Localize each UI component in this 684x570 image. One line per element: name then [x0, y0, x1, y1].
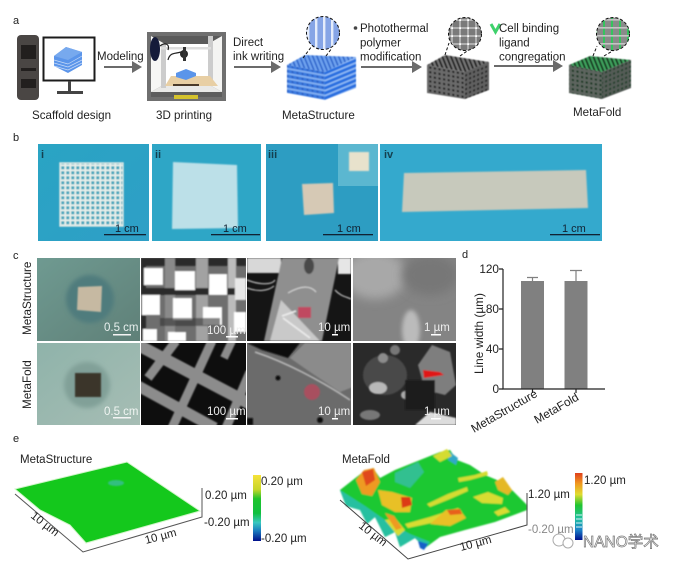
axis labels left surface — [28, 490, 250, 547]
arrow label: Cell binding ligand congregation: congregation — [499, 52, 566, 64]
panel b: scaffold photographs — [13, 132, 602, 241]
SEM: MetaFold 100 µm — [141, 343, 246, 425]
photo i: mesh scaffold — [38, 144, 149, 241]
icon: MetaStructure blue cube — [287, 16, 356, 100]
y tick labels: 40 — [486, 342, 499, 356]
axes — [499, 269, 605, 393]
caption: Scaffold design: Scaffold design — [32, 109, 111, 122]
axis labels left surface: 10 µm — [28, 510, 61, 539]
axis labels right surface: 10 µm — [459, 534, 493, 554]
SEM: MetaStructure 10 µm: 10 µm — [318, 322, 350, 334]
SEM: MetaFold 10 µm: 10 µm — [318, 406, 350, 418]
colorbar: MetaStructure: -0.20 µm — [261, 533, 307, 545]
y axis title: Line width (µm) — [472, 293, 486, 374]
panel a: fabrication workflow — [13, 15, 631, 122]
watermark: NANO学术: NANO学术 — [583, 533, 659, 551]
SEM: MetaStructure 1 µm: 1 µm — [424, 322, 450, 334]
arrow label: Cell binding ligand congregation: ligand — [499, 38, 530, 50]
photo iii: coated scaffold with inset: 1 cm — [337, 223, 361, 235]
caption: 3D printing: 3D printing — [156, 109, 212, 122]
SEM: MetaFold 1 µm — [353, 343, 456, 425]
photo i: mesh scaffold: 1 cm — [115, 223, 139, 235]
arrow label: Cell binding ligand congregation — [491, 23, 566, 64]
icon: 3D printer — [147, 32, 226, 101]
y tick labels: 80 — [486, 302, 499, 316]
photo ii: film scaffold — [152, 144, 261, 241]
heading: MetaFold: MetaFold — [342, 454, 390, 466]
SEM: MetaStructure 1 µm — [353, 258, 456, 341]
3D surface: MetaFold — [340, 449, 527, 559]
label d: d — [462, 249, 468, 261]
arrow label: Modeling: Modeling — [97, 51, 144, 63]
y tick labels: 0 — [492, 382, 499, 396]
row label: MetaFold: MetaFold — [21, 360, 34, 409]
SEM: MetaStructure 100 µm: 100 µm — [207, 325, 246, 337]
photo iv: long strip: 1 cm — [562, 223, 586, 235]
arrow label: Direct ink writing: Direct — [233, 37, 264, 49]
photo: MetaStructure sample: 0.5 cm — [104, 322, 139, 334]
label e: e — [13, 433, 19, 445]
icon: dark coated cube — [427, 18, 489, 99]
colorbar: MetaFold: 1.20 µm — [584, 475, 626, 487]
x tick labels: MetaFold — [532, 390, 581, 427]
y tick labels — [479, 262, 499, 396]
axis labels left surface: 10 µm — [144, 527, 178, 547]
axis labels right surface: -0.20 µm — [528, 524, 574, 536]
axis labels left surface: 0.20 µm — [205, 490, 247, 502]
label c: c — [13, 250, 19, 262]
arrow label: Direct ink writing: ink writing — [233, 51, 284, 63]
panel e: surface topography — [13, 433, 659, 559]
arrow: modeling to printing — [104, 66, 140, 68]
arrow label: Photothermal polymer modification: polymer — [360, 38, 401, 50]
photo ii: film scaffold: 1 cm — [223, 223, 247, 235]
SEM: MetaFold 10 µm — [247, 343, 358, 425]
SEM: MetaFold 1 µm: 1 µm — [424, 406, 450, 418]
y tick labels: 120 — [479, 262, 499, 276]
arrow label: Photothermal polymer modification: Photothermal — [360, 23, 428, 35]
arrow label: Cell binding ligand congregation: Cell binding — [499, 23, 559, 35]
photo iv: long strip: iv — [384, 149, 394, 161]
arrow: congregation — [494, 65, 561, 67]
photo iv: long strip — [380, 144, 602, 241]
bars with error bars — [521, 270, 588, 389]
axis labels right surface: 10 µm — [356, 520, 389, 549]
caption: MetaFold: MetaFold — [573, 106, 621, 119]
arrow: printing to MetaStructure — [234, 66, 279, 68]
photo: MetaFold sample — [37, 343, 140, 425]
photo i: mesh scaffold: i — [41, 149, 44, 161]
heading: MetaStructure: MetaStructure — [20, 454, 92, 466]
icon: MetaFold green cube — [569, 18, 631, 99]
SEM: MetaStructure 10 µm — [247, 258, 351, 341]
photo: MetaStructure sample — [37, 258, 140, 341]
x tick labels: MetaStructure — [468, 386, 540, 436]
photo: MetaFold sample: 0.5 cm — [104, 406, 139, 418]
watermark: NANO学术 — [553, 533, 659, 551]
colorbar: MetaFold — [575, 473, 626, 540]
colorbar: MetaStructure — [253, 475, 307, 545]
photo ii: film scaffold: ii — [155, 149, 161, 161]
arrow: modification — [361, 66, 420, 68]
axis labels left surface: -0.20 µm — [204, 517, 250, 529]
3D surface: MetaStructure — [15, 462, 202, 552]
label a: a — [13, 15, 20, 27]
photo iii: coated scaffold with inset: iii — [268, 149, 277, 161]
icon: computer with scaffold design — [17, 35, 94, 100]
axis labels right surface: 1.20 µm — [528, 489, 570, 501]
panel d: line width bar chart — [462, 249, 605, 436]
colorbar: MetaStructure: 0.20 µm — [261, 476, 303, 488]
row label: MetaStructure: MetaStructure — [21, 262, 34, 335]
SEM: MetaStructure 100 µm — [141, 258, 246, 341]
caption: MetaStructure: MetaStructure — [282, 109, 355, 122]
arrow label: Photothermal polymer modification: modification — [360, 52, 421, 64]
axis labels right surface — [356, 489, 574, 554]
panel c: microscopy grid — [13, 250, 458, 428]
arrow label: Photothermal polymer modification — [354, 23, 428, 64]
SEM: MetaFold 100 µm: 100 µm — [207, 406, 246, 418]
x tick labels — [468, 386, 581, 436]
photo iii: coated scaffold with inset — [266, 144, 378, 241]
label b: b — [13, 132, 19, 144]
